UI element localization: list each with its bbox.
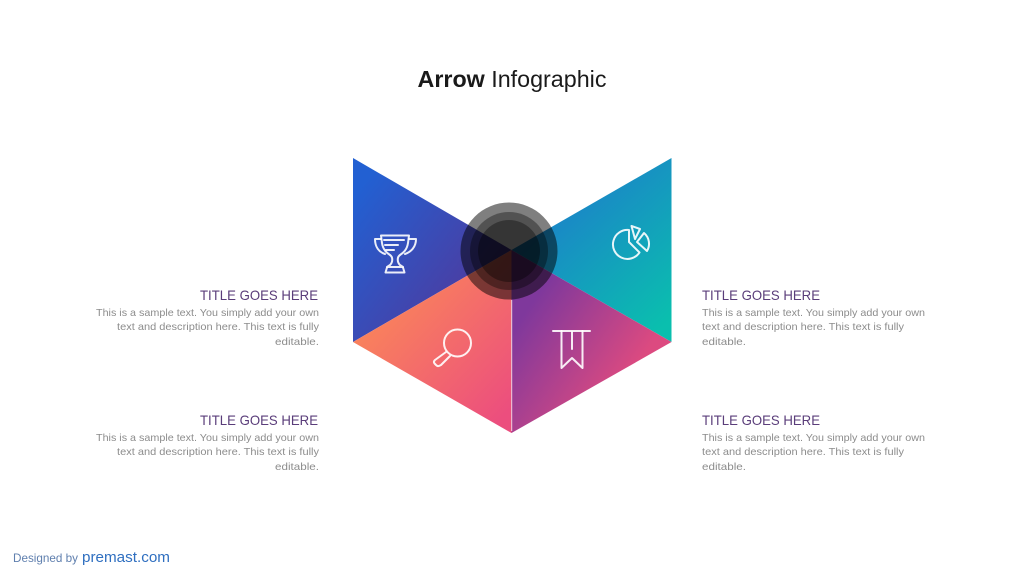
icon: pie chart xyxy=(613,226,649,259)
text block: bottom left: text and description here. This text is fully xyxy=(117,446,320,458)
text block: bottom left: TITLE GOES HERE xyxy=(200,412,318,428)
text block: bottom right: editable. xyxy=(702,461,746,473)
text block: top left: editable. xyxy=(275,336,319,348)
panel: blue segment xyxy=(353,158,512,342)
text block: top right xyxy=(702,287,925,348)
icon: trophy xyxy=(375,236,416,272)
text block: bottom right: text and description here. This text is fully xyxy=(702,446,905,458)
text block: top right: text and description here. This text is fully xyxy=(702,321,905,333)
text block: top left: text and description here. This text is fully xyxy=(117,321,320,333)
text block: top left: This is a sample text. You simply add your own xyxy=(96,307,319,319)
icon: magnifying glass xyxy=(434,330,471,366)
footer credit: Designed by xyxy=(13,551,78,565)
text block: top left xyxy=(96,287,320,348)
panel: orange segment xyxy=(353,250,512,433)
title: Arrow Infographic xyxy=(418,66,606,92)
text block: top right: This is a sample text. You simply add your own xyxy=(702,307,925,319)
text block: bottom right xyxy=(702,412,925,473)
arrow diagram xyxy=(353,158,672,433)
icon: bookmark xyxy=(553,331,590,368)
text block: top left: TITLE GOES HERE xyxy=(200,287,318,303)
center concentric circles xyxy=(460,202,558,300)
text block: bottom right: This is a sample text. You simply add your own xyxy=(702,432,925,444)
footer credit: premast.com xyxy=(82,549,170,566)
text block: bottom left xyxy=(96,412,320,473)
panel: teal segment xyxy=(512,158,672,342)
text block: top right: editable. xyxy=(702,336,746,348)
text block: top right: TITLE GOES HERE xyxy=(702,287,820,303)
text block: bottom left: This is a sample text. You simply add your own xyxy=(96,432,319,444)
footer credit xyxy=(13,549,170,566)
text block: bottom left: editable. xyxy=(275,461,319,473)
panel: magenta segment xyxy=(512,250,672,433)
text block: bottom right: TITLE GOES HERE xyxy=(702,412,820,428)
